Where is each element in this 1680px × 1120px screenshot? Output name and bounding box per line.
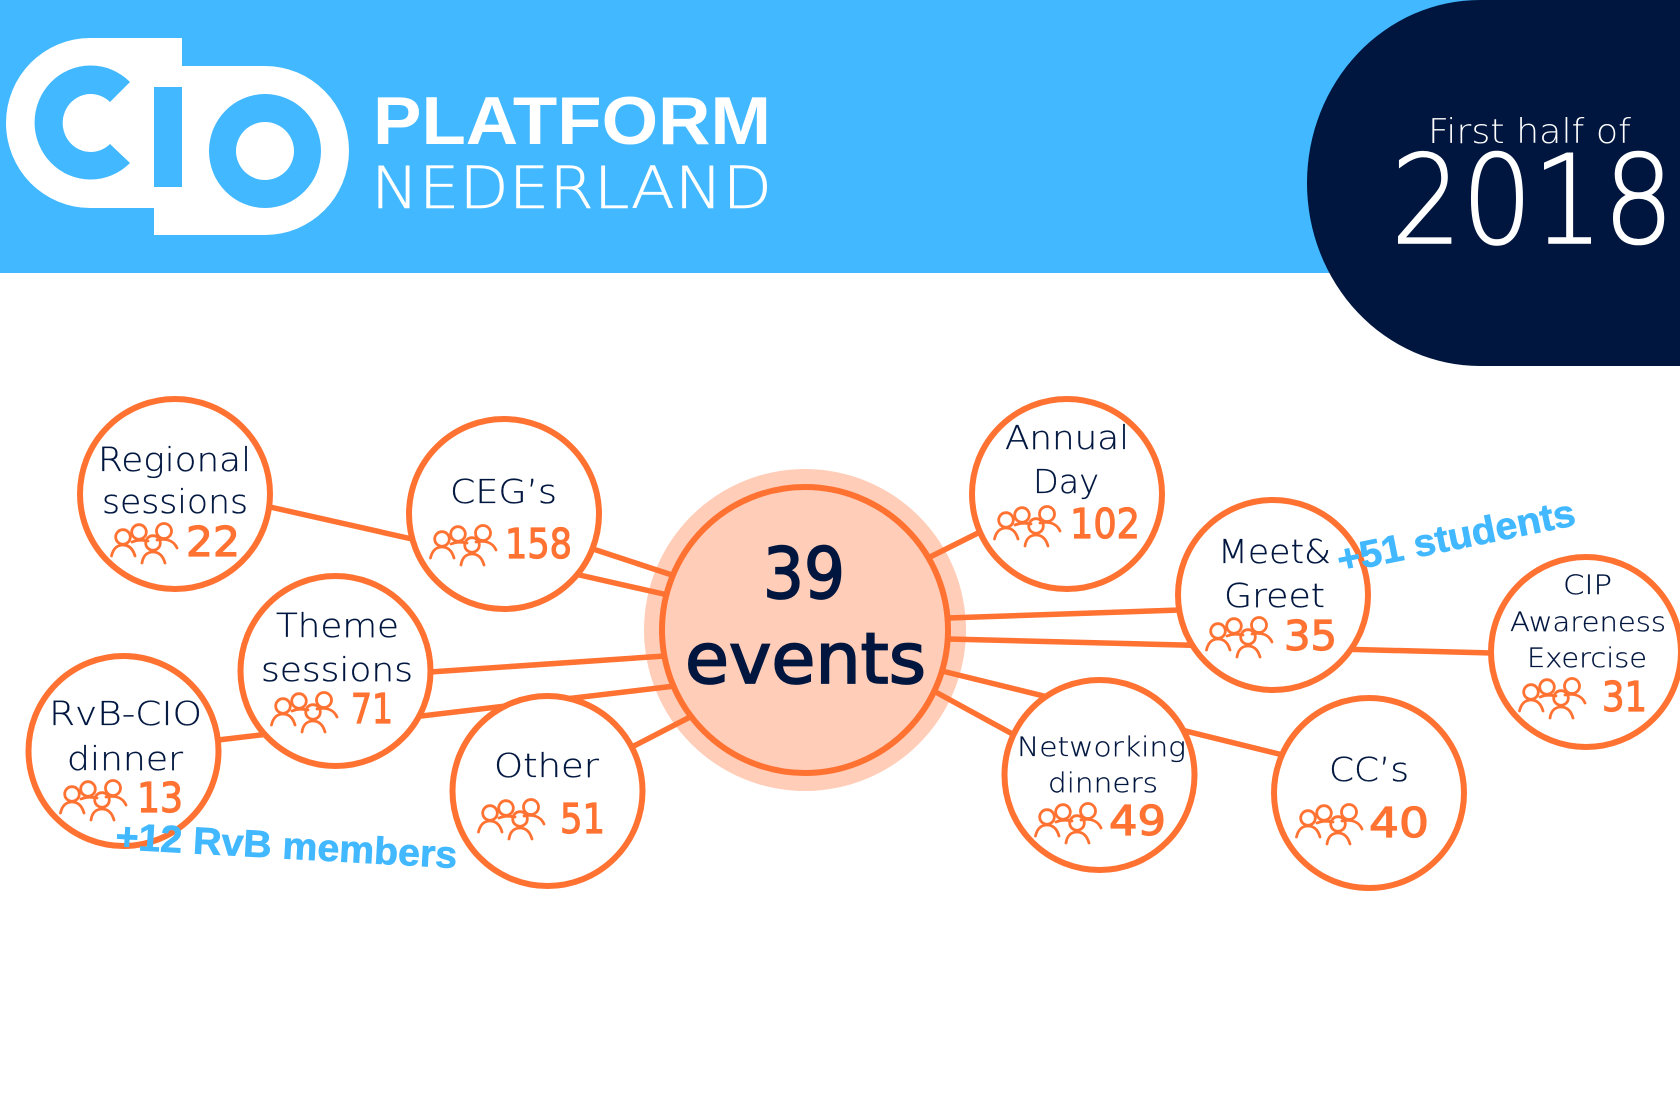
node: Regional sessions <box>80 399 270 589</box>
callout: +12 RvB members: +12 RvB members <box>114 816 458 877</box>
label: Meet & Greet <box>1218 532 1331 615</box>
label: Annual Day: Annual <box>1005 418 1129 457</box>
logo: CIO Platform Nederland <box>6 38 772 235</box>
logo word: Platform: PLATFORM <box>373 83 771 159</box>
count: 158: 158 <box>505 520 572 568</box>
count: 31: 31 <box>1602 673 1647 721</box>
icon: people <box>994 506 1060 546</box>
label: Annual Day <box>1005 418 1129 501</box>
label: CIP Awareness Exercise: CIP <box>1563 570 1612 601</box>
icon: people <box>478 800 544 839</box>
badge text: first half of: First half of <box>1428 112 1631 152</box>
icon: people <box>272 692 337 732</box>
label: CIP Awareness Exercise: Exercise <box>1527 643 1647 674</box>
label: Theme sessions <box>261 606 413 689</box>
label: Regional sessions: sessions <box>102 482 248 521</box>
label: RvB-CIO dinner <box>49 694 202 778</box>
count: 22: 22 <box>186 518 240 566</box>
hub: 39 events <box>662 487 948 773</box>
icon: people <box>1206 618 1272 657</box>
connector lines <box>218 507 1492 755</box>
label: CEG's: CEG’s <box>450 472 557 511</box>
node: Meet & Greet <box>1178 500 1368 690</box>
label: Networking dinners: dinners <box>1048 768 1158 799</box>
count: 102: 102 <box>1070 500 1140 548</box>
label: Regional sessions <box>98 440 251 521</box>
icon: people <box>1520 678 1585 718</box>
count: 49: 49 <box>1109 797 1166 845</box>
header band <box>0 0 1680 273</box>
label: CC's: CC’s <box>1329 750 1409 789</box>
count: 40: 40 <box>1369 799 1429 847</box>
label: Meet & Greet: Greet <box>1224 576 1325 615</box>
node: Networking dinners <box>1004 680 1194 870</box>
node: CEG's <box>409 419 599 609</box>
label: Theme sessions: sessions <box>261 650 413 689</box>
node: Annual Day <box>972 399 1162 589</box>
count: 71: 71 <box>351 685 393 733</box>
node: Theme sessions <box>240 576 430 766</box>
logo mark: CIO <box>6 38 349 235</box>
callout: +51 students: +51 students <box>1333 492 1579 582</box>
label: Other: Other <box>494 746 599 785</box>
label: RvB-CIO dinner: RvB-CIO <box>49 694 202 733</box>
label: Theme sessions: Theme <box>276 606 399 645</box>
logo word: Nederland: NEDERLAND <box>371 154 772 222</box>
count: 35: 35 <box>1284 612 1337 660</box>
date badge <box>1307 0 1680 366</box>
label: Annual Day: Day <box>1033 462 1099 501</box>
count: 13: 13 <box>137 774 183 822</box>
count: 51: 51 <box>560 795 605 843</box>
node: RvB-CIO dinner <box>28 656 218 846</box>
hub number: 39 <box>763 533 845 615</box>
node: Other <box>452 696 642 886</box>
icon: people <box>60 780 126 820</box>
label: Regional sessions: Regional <box>98 440 251 479</box>
node: CC's <box>1274 698 1464 888</box>
label: CIP Awareness Exercise: Awareness <box>1510 607 1666 638</box>
hub halo <box>644 469 966 791</box>
icon: people <box>430 526 496 565</box>
label: Meet & Greet: Meet& <box>1218 532 1331 571</box>
node: CIP Awareness Exercise <box>1491 557 1680 747</box>
hub label: events <box>685 618 926 700</box>
label: Networking dinners <box>1017 732 1186 799</box>
label: CIP Awareness Exercise <box>1510 570 1666 674</box>
icon: people <box>112 524 177 563</box>
label: Networking dinners: Networking <box>1017 732 1186 763</box>
icon: people <box>1296 804 1362 844</box>
label: RvB-CIO dinner: dinner <box>67 739 183 778</box>
icon: people <box>1036 804 1101 843</box>
